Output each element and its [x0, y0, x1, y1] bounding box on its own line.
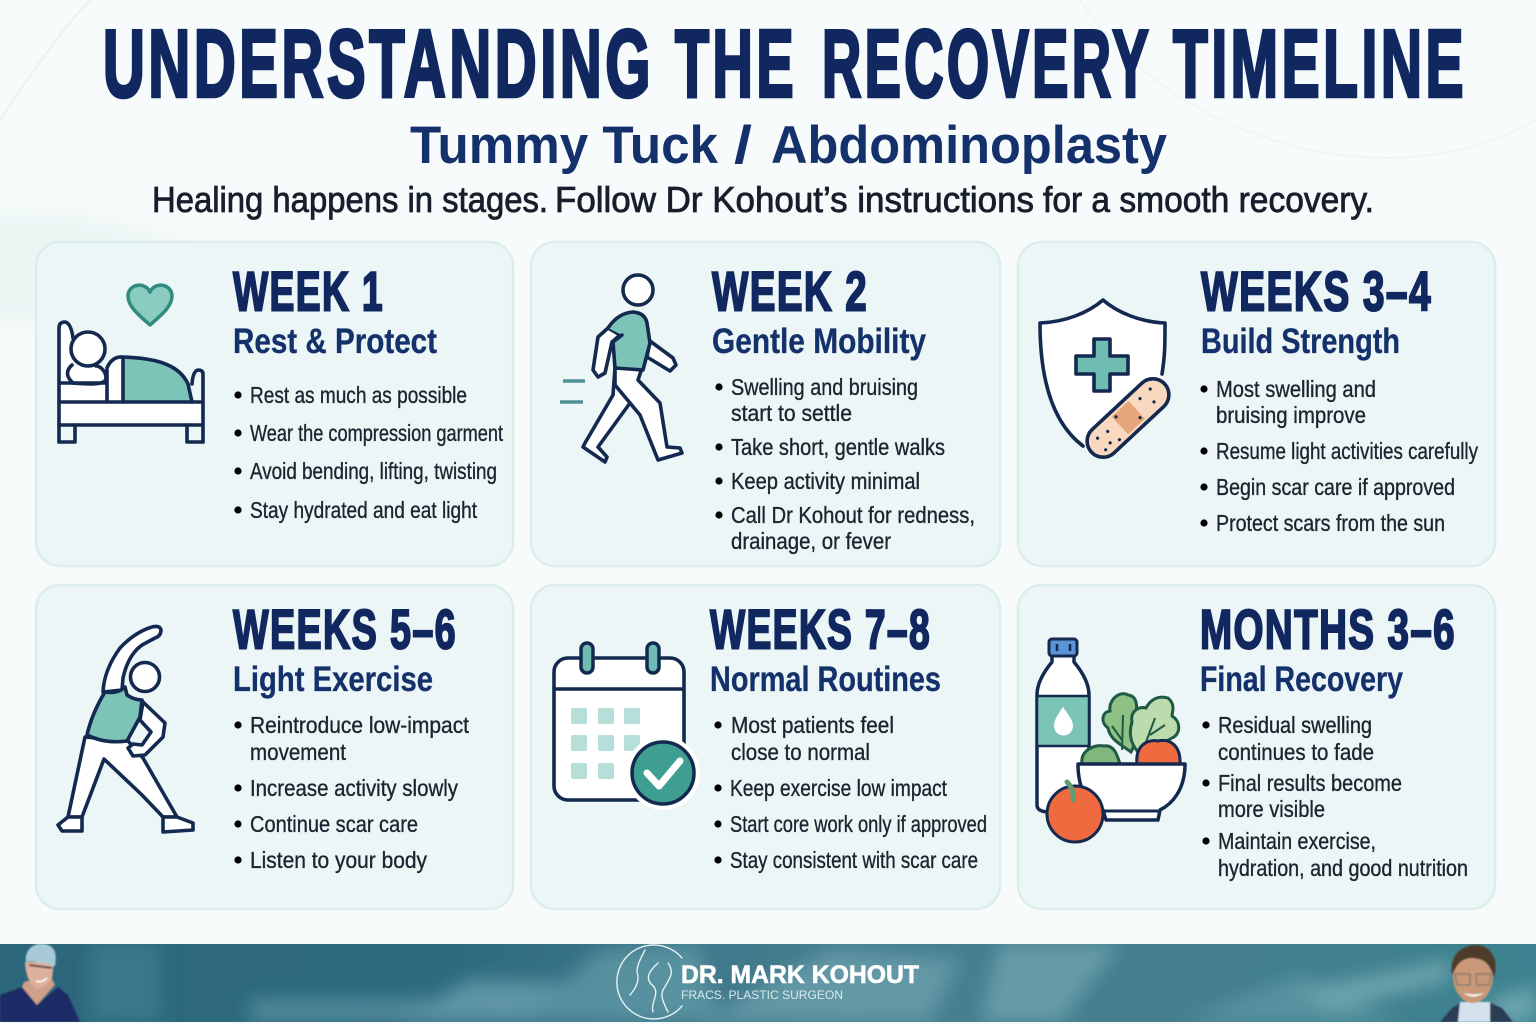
icon: shield with cross and bandage — [1040, 300, 1175, 464]
weeks 7-8 bullet list: Stay consistent with scar care — [730, 847, 978, 873]
weeks 7-8 bullet list: close to normal — [731, 739, 870, 765]
logo credential: FRACS. PLASTIC SURGEON — [681, 988, 843, 1002]
months 3-6 bullet list — [1202, 712, 1468, 881]
panel: weeks 5-6 — [36, 585, 513, 909]
weeks 5-6 bullet list: Increase activity slowly — [250, 775, 458, 801]
icon: person walking — [560, 275, 682, 462]
months 3-6 bullet list: hydration, and good nutrition — [1218, 855, 1468, 881]
footer banner — [0, 944, 1536, 1022]
weeks 3-4 bullet list — [1200, 376, 1478, 536]
panel: months 3-6 — [1018, 585, 1495, 909]
weeks 3-4 bullet list: Begin scar care if approved — [1216, 474, 1455, 500]
months 3-6 bullet list: continues to fade — [1218, 739, 1374, 765]
title: THE — [675, 10, 797, 118]
months 3-6 bullet list: Final results become — [1218, 770, 1402, 796]
panel: weeks 3-4 — [1018, 242, 1495, 566]
surgeon photo, right — [1440, 945, 1513, 1022]
logo name: DR. MARK KOHOUT — [681, 961, 919, 989]
panel: weeks 7-8 — [531, 585, 1000, 909]
week 1 bullet list — [234, 382, 503, 523]
panel: week 2 — [531, 242, 1000, 566]
weeks 7-8 subheading: Normal Routines — [710, 660, 941, 699]
weeks 5-6 bullet list: Continue scar care — [250, 811, 418, 837]
weeks 3-4 bullet list: Resume light activities carefully — [1216, 438, 1478, 464]
tagline: for a smooth recovery. — [1043, 179, 1374, 220]
title — [103, 10, 1467, 118]
week 2 bullet list — [715, 374, 975, 554]
weeks 5-6 bullet list: Reintroduce low-impact — [250, 712, 470, 738]
icon: calendar with check mark — [554, 643, 700, 810]
week 2 bullet list: Take short, gentle walks — [731, 434, 945, 460]
weeks 3-4 subheading: Build Strength — [1201, 322, 1400, 361]
weeks 5-6 bullet list: Listen to your body — [250, 847, 427, 873]
months 3-6 bullet list: Residual swelling — [1218, 712, 1372, 738]
panel: week 1 — [36, 242, 513, 566]
week 1 bullet list: Stay hydrated and eat light — [250, 497, 477, 523]
weeks 5-6 bullet list — [234, 712, 470, 873]
months 3-6 bullet list: Maintain exercise, — [1218, 828, 1376, 854]
weeks 3-4 bullet list: bruising improve — [1216, 402, 1366, 428]
title: UNDERSTANDING — [103, 10, 654, 118]
weeks 3-4 bullet list: Most swelling and — [1216, 376, 1376, 402]
months 3-6 bullet list: more visible — [1218, 796, 1325, 822]
week 2 heading: WEEK 2 — [712, 260, 868, 322]
subtitle: Tummy Tuck — [410, 116, 718, 175]
icon: water bottle, salad bowl and apple — [1037, 639, 1185, 842]
months 3-6 subheading: Final Recovery — [1200, 660, 1403, 699]
weeks 7-8 bullet list: Start core work only if approved — [730, 811, 987, 837]
week 2 bullet list: Keep activity minimal — [731, 468, 920, 494]
weeks 7-8 heading: WEEKS 7–8 — [710, 598, 931, 660]
weeks 7-8 bullet list: Keep exercise low impact — [730, 775, 947, 801]
week 2 bullet list: drainage, or fever — [731, 528, 891, 554]
week 2 bullet list: Swelling and bruising — [731, 374, 918, 400]
week 1 bullet list: Rest as much as possible — [250, 382, 467, 408]
weeks 5-6 bullet list: movement — [250, 739, 347, 765]
weeks 7-8 bullet list — [714, 712, 987, 873]
week 2 bullet list: start to settle — [731, 400, 852, 426]
weeks 5-6 heading: WEEKS 5–6 — [233, 598, 457, 660]
week 1 subheading: Rest & Protect — [233, 322, 437, 361]
weeks 3-4 bullet list: Protect scars from the sun — [1216, 510, 1445, 536]
tagline: Healing happens in stages. — [152, 179, 548, 220]
subtitle: Abdominoplasty — [771, 116, 1167, 175]
weeks 3-4 heading: WEEKS 3–4 — [1201, 260, 1432, 322]
tagline — [152, 179, 1374, 220]
weeks 7-8 bullet list: Most patients feel — [731, 712, 894, 738]
title: RECOVERY — [822, 10, 1152, 118]
week 1 bullet list: Wear the compression garment — [250, 420, 503, 446]
logo: body outline in circle — [617, 945, 682, 1019]
surgeon photo, left — [0, 944, 80, 1022]
week 2 bullet list: Call Dr Kohout for redness, — [731, 502, 975, 528]
icon: patient resting in bed with heart — [59, 285, 203, 442]
weeks 5-6 subheading: Light Exercise — [233, 660, 433, 699]
week 1 bullet list: Avoid bending, lifting, twisting — [250, 458, 497, 484]
subtitle: / — [734, 116, 752, 175]
week 2 subheading: Gentle Mobility — [712, 322, 926, 361]
week 1 heading: WEEK 1 — [233, 260, 384, 322]
icon: person side stretching — [58, 626, 193, 832]
subtitle — [410, 116, 1167, 175]
tagline: Follow Dr Kohout’s instructions — [555, 179, 1034, 220]
